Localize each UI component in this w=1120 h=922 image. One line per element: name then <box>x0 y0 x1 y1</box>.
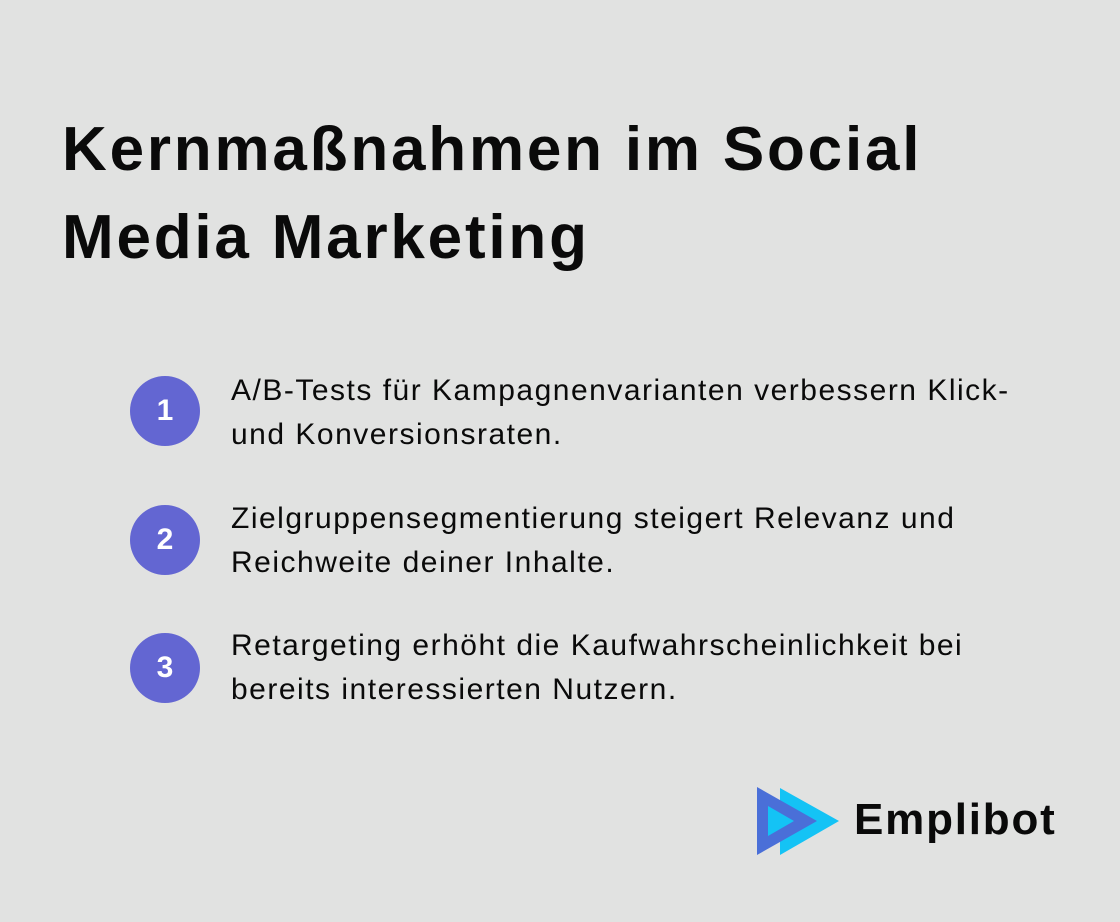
item 1 <box>130 374 1010 451</box>
number 2: 2 <box>157 523 173 556</box>
text 1: A/B-Tests für Kampagnenvarianten verbessern Klick- <box>231 374 1010 407</box>
number 2 <box>130 505 200 575</box>
text 2 <box>231 502 955 579</box>
number 1: 1 <box>157 394 173 427</box>
number 3: 3 <box>157 651 173 684</box>
text 3 <box>231 629 963 706</box>
title <box>62 115 922 272</box>
text 3: bereits interessierten Nutzern. <box>231 673 678 706</box>
logo text: Emplibot <box>854 795 1057 844</box>
logo <box>757 787 1057 855</box>
text 2: Zielgruppensegmentierung steigert Relevanz und <box>231 502 955 535</box>
number 3 <box>130 633 200 703</box>
title: Media Marketing <box>62 203 590 272</box>
item 2 <box>130 502 955 579</box>
text 2: Reichweite deiner Inhalte. <box>231 546 615 579</box>
number 1 <box>130 376 200 446</box>
text 3: Retargeting erhöht die Kaufwahrscheinlichkeit bei <box>231 629 963 662</box>
text 1 <box>231 374 1010 451</box>
item 3 <box>130 629 963 706</box>
title: Kernmaßnahmen im Social <box>62 115 922 184</box>
text 1: und Konversionsraten. <box>231 418 563 451</box>
icon: play triangles <box>757 787 839 855</box>
